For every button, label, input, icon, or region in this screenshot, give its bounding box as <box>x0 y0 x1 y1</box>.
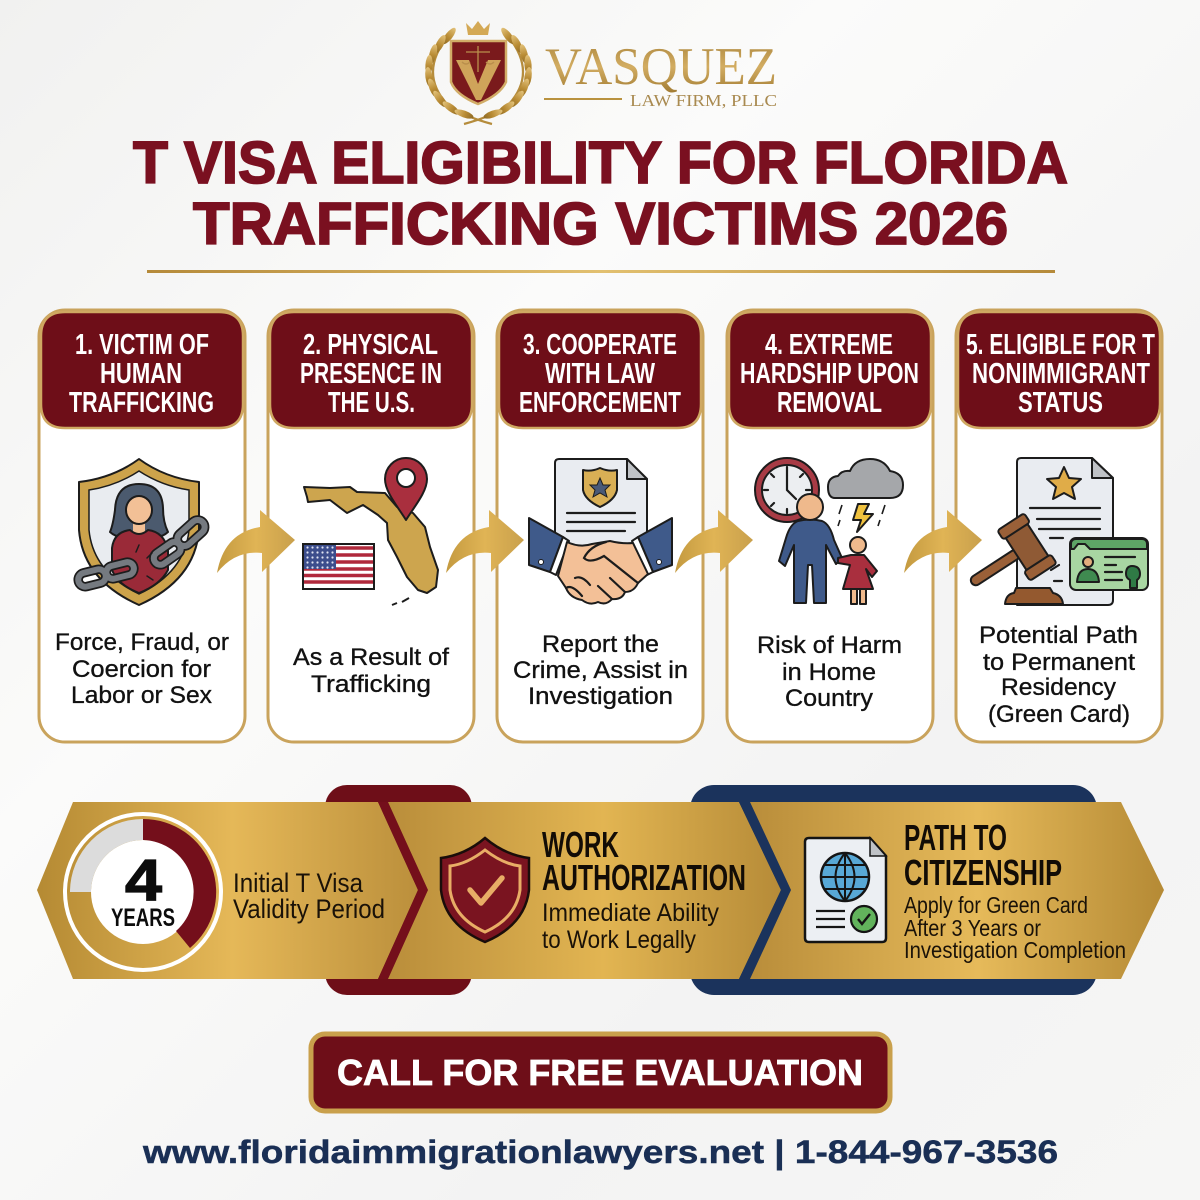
description: As a Result of <box>293 644 449 671</box>
text: work authorization: to Work Legally <box>542 926 696 954</box>
heading: step 2 <box>270 312 472 428</box>
description: (Green Card) <box>988 701 1130 728</box>
heading: step 4: 4. EXTREME <box>765 329 893 361</box>
arrow: step 4 to 5 <box>904 510 982 573</box>
icon: clock, family and storm <box>755 458 903 604</box>
label: validity: Validity Period <box>233 894 385 924</box>
segment: 4 years <box>37 802 418 979</box>
arrow: step 3 to 4 <box>675 510 753 573</box>
heading: path to citizenship: CITIZENSHIP <box>904 852 1062 893</box>
heading: step 2: 2. PHYSICAL <box>303 329 438 361</box>
contact line: www.floridaimmigrationlawyers.net | 1-844-967-3536 <box>142 1134 1058 1170</box>
label: validity <box>233 868 385 924</box>
text: path to citizenship: Investigation Completion <box>904 937 1126 963</box>
banner: key benefits <box>37 785 1164 995</box>
label: validity: Initial T Visa <box>233 868 364 898</box>
description: Force, Fraud, or <box>55 629 229 656</box>
heading: step 3: WITH LAW <box>545 358 655 390</box>
description: Risk of Harm <box>757 632 902 659</box>
chevron divider: navy <box>739 802 791 979</box>
panel: step 4 <box>727 310 933 742</box>
heading: work authorization: WORK <box>542 824 619 865</box>
logo: Vasquez Law Firm <box>424 21 777 124</box>
panel: step 1 <box>39 310 245 742</box>
segment: path to citizenship <box>750 802 1164 979</box>
description: Investigation <box>528 683 673 710</box>
title: TRAFFICKING VICTIMS 2026 <box>193 191 1008 257</box>
icon: laurel wreath <box>424 26 533 124</box>
icon: globe document <box>805 838 886 942</box>
heading: step 5: NONIMMIGRANT <box>972 358 1150 390</box>
heading: step 2: PRESENCE IN <box>300 358 442 390</box>
panel: step 2 <box>268 310 474 742</box>
description: Potential Path <box>979 622 1138 649</box>
heading: work authorization: AUTHORIZATION <box>542 857 746 898</box>
chart: 4 year donut: 4 <box>125 848 162 913</box>
description <box>293 644 449 698</box>
description <box>513 631 688 710</box>
arrow: step 1 to 2 <box>217 510 295 573</box>
heading: step 4: REMOVAL <box>777 387 882 419</box>
description <box>757 632 902 712</box>
wordmark: VASQUEZ <box>545 38 777 96</box>
description: Coercion for <box>72 656 211 683</box>
chart: 4 year donut <box>65 814 221 970</box>
navy tab <box>690 785 1097 995</box>
chevron divider: maroon <box>378 802 428 979</box>
maroon tab <box>325 785 472 995</box>
icon: police report and handshake <box>529 459 672 604</box>
description: Country <box>785 685 873 712</box>
icon: shield with broken chain <box>77 459 208 605</box>
text: path to citizenship: After 3 Years or <box>904 915 1041 941</box>
arrow: step 2 to 3 <box>446 510 524 573</box>
icon: crown <box>466 21 490 35</box>
description: Labor or Sex <box>71 682 212 709</box>
panel: step 5 <box>955 310 1162 742</box>
call to action button <box>311 1034 890 1111</box>
heading: step 5: STATUS <box>1018 387 1103 419</box>
chart: 4 year donut: YEARS <box>111 904 175 932</box>
icon: shield emblem <box>451 41 506 104</box>
panel: step 3 <box>497 310 703 742</box>
tagline: LAW FIRM, PLLC <box>630 91 777 110</box>
description: to Permanent <box>983 649 1135 676</box>
text: path to citizenship: Apply for Green Card <box>904 892 1088 918</box>
call to action button: CALL FOR FREE EVALUATION <box>337 1052 863 1093</box>
heading: step 1 <box>41 312 243 428</box>
heading: path to citizenship: PATH TO <box>904 817 1007 858</box>
heading: path to citizenship <box>904 817 1062 893</box>
text: work authorization: Immediate Ability <box>542 899 719 927</box>
description: Report the <box>542 631 659 658</box>
heading: step 5 <box>958 312 1160 428</box>
description <box>979 622 1138 728</box>
heading: step 4 <box>729 312 931 428</box>
text: work authorization <box>542 899 719 954</box>
icon: document, gavel and green card <box>955 458 1148 608</box>
description: Trafficking <box>311 671 431 698</box>
title: T VISA ELIGIBILITY FOR FLORIDA <box>133 130 1068 196</box>
description: in Home <box>782 659 876 686</box>
description: Crime, Assist in <box>513 657 688 684</box>
heading: step 3: 3. COOPERATE <box>523 329 677 361</box>
heading: step 1: TRAFFICKING <box>69 387 214 419</box>
heading: work authorization <box>542 824 746 898</box>
heading: step 4: HARDSHIP UPON <box>740 358 919 390</box>
heading: step 2: THE U.S. <box>328 387 415 419</box>
heading: step 1: 1. VICTIM OF <box>75 329 209 361</box>
segment: work authorization <box>388 802 781 979</box>
icon: Florida map, pin and US flag <box>303 458 438 605</box>
heading: step 3 <box>499 312 701 428</box>
heading: step 1: HUMAN <box>100 358 182 390</box>
text: path to citizenship <box>904 892 1126 963</box>
description <box>55 629 229 709</box>
icon: check shield <box>441 838 529 942</box>
description: Residency <box>1001 674 1116 701</box>
heading: step 3: ENFORCEMENT <box>519 387 681 419</box>
title <box>133 130 1068 257</box>
